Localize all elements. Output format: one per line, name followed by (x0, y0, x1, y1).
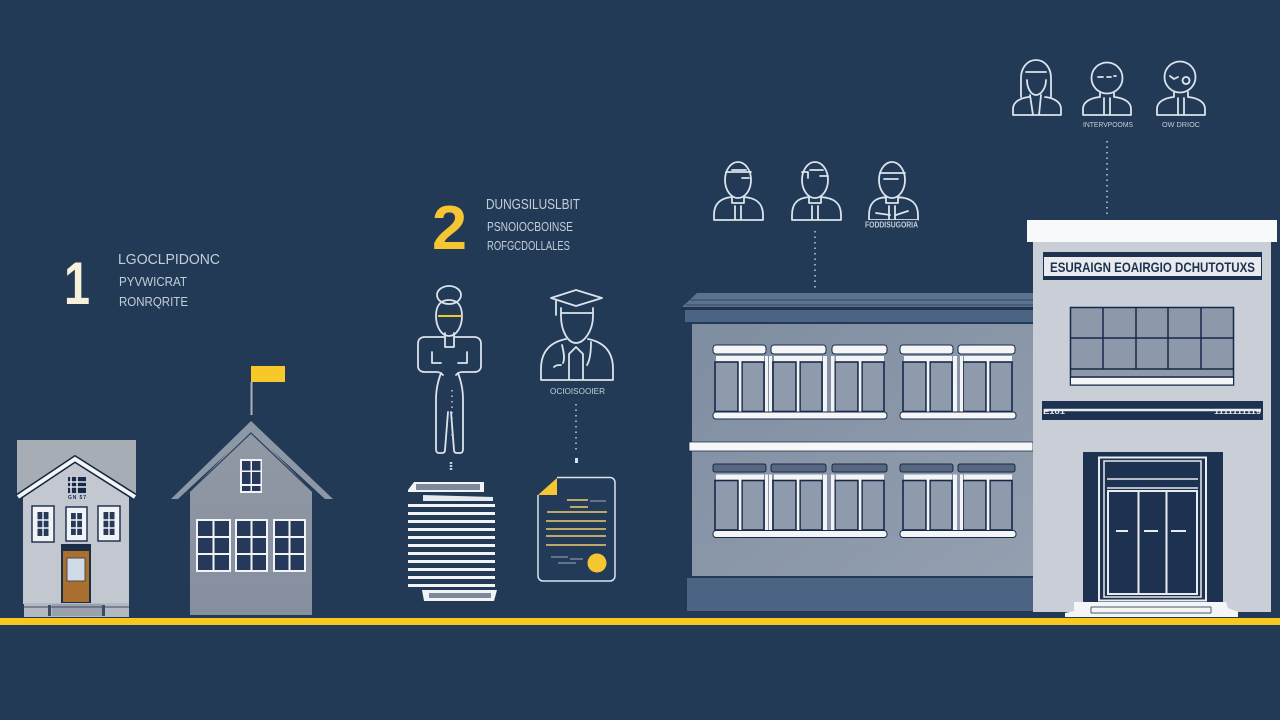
page lines (408, 506, 495, 586)
bottom book (422, 590, 497, 601)
step 1 label (64, 250, 220, 317)
stack of books (408, 482, 497, 601)
school windows (197, 520, 305, 571)
person (714, 162, 763, 220)
dotted connector: graduate to diploma (575, 404, 578, 463)
school house with flag (171, 366, 333, 615)
step 2 label: 2 (432, 194, 467, 263)
small house (17, 440, 136, 617)
dotted connector: people to main building (1106, 141, 1108, 216)
person with long hair (1013, 60, 1061, 115)
attic sign (68, 477, 86, 501)
person with glasses and label: OW DRIOC (1162, 120, 1201, 129)
lower band: E101 (1043, 409, 1065, 416)
entrance steps (1065, 602, 1238, 617)
main building (1027, 220, 1277, 617)
graduate: OCIOISOOIER (550, 386, 605, 396)
diploma (538, 478, 615, 581)
large window (1070, 307, 1234, 385)
person (792, 162, 841, 220)
roof (681, 293, 1033, 322)
upper windows (713, 345, 1016, 419)
attic sign: GN 57 (68, 495, 86, 501)
person with label (864, 162, 918, 230)
seal (588, 554, 606, 572)
step 2 label (432, 194, 580, 263)
ground line (0, 618, 1280, 625)
graduate (541, 290, 613, 396)
lower windows (713, 464, 1016, 538)
lower band (1042, 401, 1263, 420)
building base (687, 578, 1033, 611)
step 1 label: RONRQRITE (119, 294, 188, 309)
step 1 label: PYVWICRAT (119, 274, 187, 289)
people row 3 (1013, 60, 1205, 129)
step 2 label: DUNGSILUSLBIT (486, 196, 580, 213)
person with bun (418, 286, 481, 470)
floor band (689, 442, 1033, 451)
person with label: FODDISUGORIA (865, 220, 918, 230)
step 2 label: ROFGCDOLLALES (487, 238, 570, 253)
person with label: INTERVPOOMS (1083, 120, 1133, 129)
people row 2 (714, 162, 918, 230)
house windows (32, 506, 120, 542)
attic window (240, 459, 262, 493)
building sign (1043, 252, 1262, 280)
person with glasses and label (1157, 62, 1205, 129)
top books (408, 482, 493, 501)
dotted connector: people to building (814, 231, 816, 290)
entrance (1083, 452, 1223, 602)
lower band: 1111111119 (1214, 409, 1261, 416)
person with label (1083, 62, 1133, 129)
flag (250, 366, 285, 415)
house steps (24, 603, 129, 617)
mid-size building (681, 293, 1033, 611)
step 1 label: 1 (64, 250, 90, 317)
roof slab (1027, 220, 1277, 242)
house door (61, 544, 91, 603)
step 1 label: LGOCLPIDONC (118, 251, 220, 268)
step 2 label: PSNOIOCBOINSE (487, 219, 573, 234)
